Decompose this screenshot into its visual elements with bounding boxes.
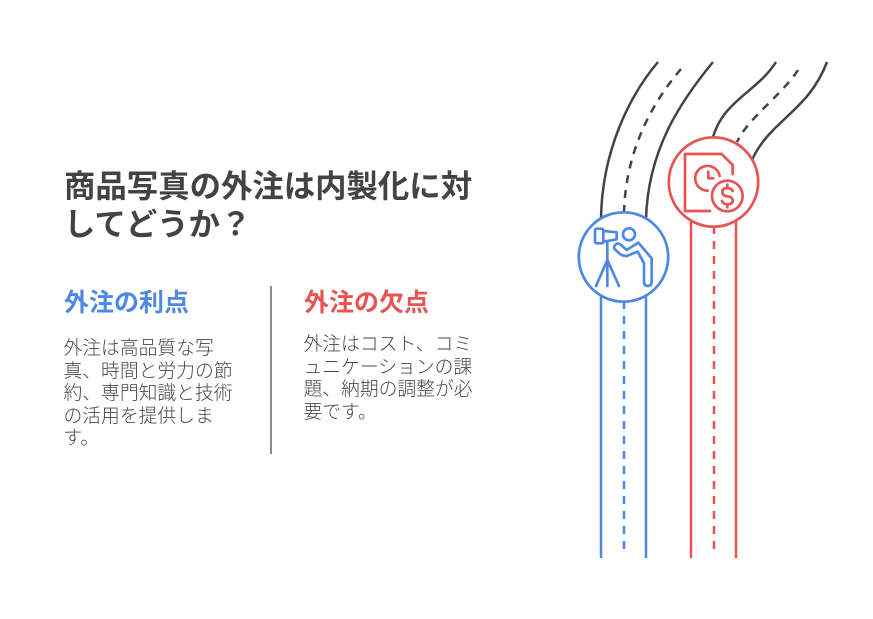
text: pros description: す。 [64, 427, 99, 448]
road: grey upper left [601, 62, 713, 219]
road: red lower [691, 220, 736, 558]
title: 商品写真の外注は内製化に対 [64, 169, 472, 204]
heading: cons: 外注の欠点 [304, 289, 429, 317]
text: cons description: 要です。 [304, 400, 377, 422]
divider between columns [270, 286, 272, 454]
road: grey upper right [713, 62, 827, 160]
text: cons description: ュニケーションの課 [304, 356, 472, 376]
icon: photographer with camera in blue circle [579, 212, 668, 302]
heading: pros: 外注の利点 [64, 289, 189, 317]
title: してどうか？ [64, 207, 251, 242]
text: pros description: の活用を提供しま [64, 404, 214, 426]
text: cons description: 題、納期の調整が必 [304, 378, 473, 399]
text: pros description [64, 337, 233, 448]
text: cons description: 外注はコスト、コミ [304, 333, 472, 354]
text: pros description: 外注は高品質な写 [64, 337, 214, 358]
text: pros description: 約、専門知識と技術 [64, 382, 233, 403]
icon: document with clock and dollar in red circle [669, 137, 758, 227]
text: cons description [304, 333, 473, 422]
text: pros description: 真、時間と労力の節 [64, 360, 233, 380]
road: blue lower [601, 295, 646, 558]
title [64, 169, 472, 242]
